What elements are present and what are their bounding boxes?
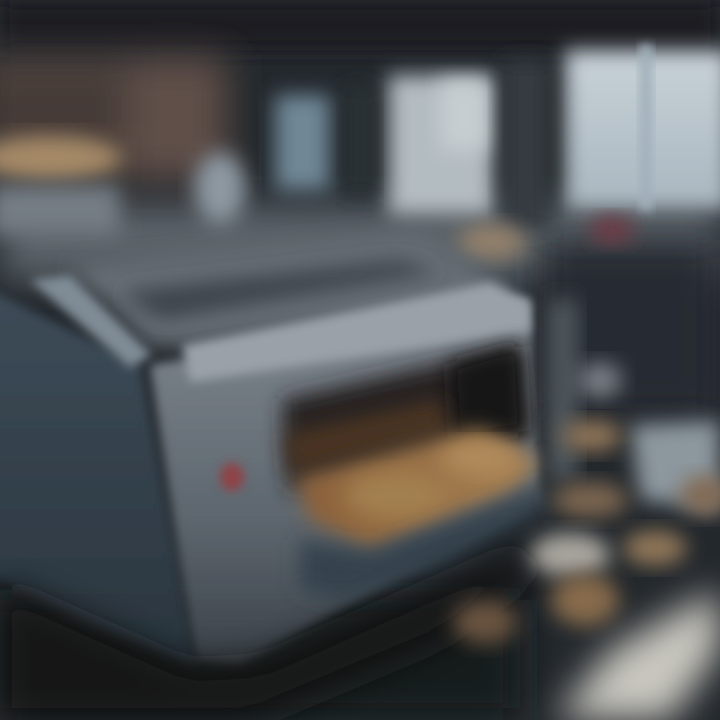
oven front face — [150, 300, 540, 665]
right side table with loaves — [453, 300, 720, 644]
oven top surface — [70, 235, 520, 345]
oven top rail highlight — [182, 282, 530, 382]
oven top left highlight — [30, 275, 152, 368]
brick wall at left — [0, 55, 230, 180]
oven left side panel — [0, 285, 195, 665]
loaves on back shelf — [0, 136, 634, 260]
windows — [275, 45, 720, 230]
bread tray — [295, 428, 540, 550]
tray front lip — [300, 485, 550, 600]
bright floor reflection — [555, 590, 720, 720]
red indicator button — [220, 463, 244, 491]
oven machine — [0, 235, 550, 665]
oven shadow on floor — [0, 550, 540, 720]
oven opening — [282, 345, 530, 490]
